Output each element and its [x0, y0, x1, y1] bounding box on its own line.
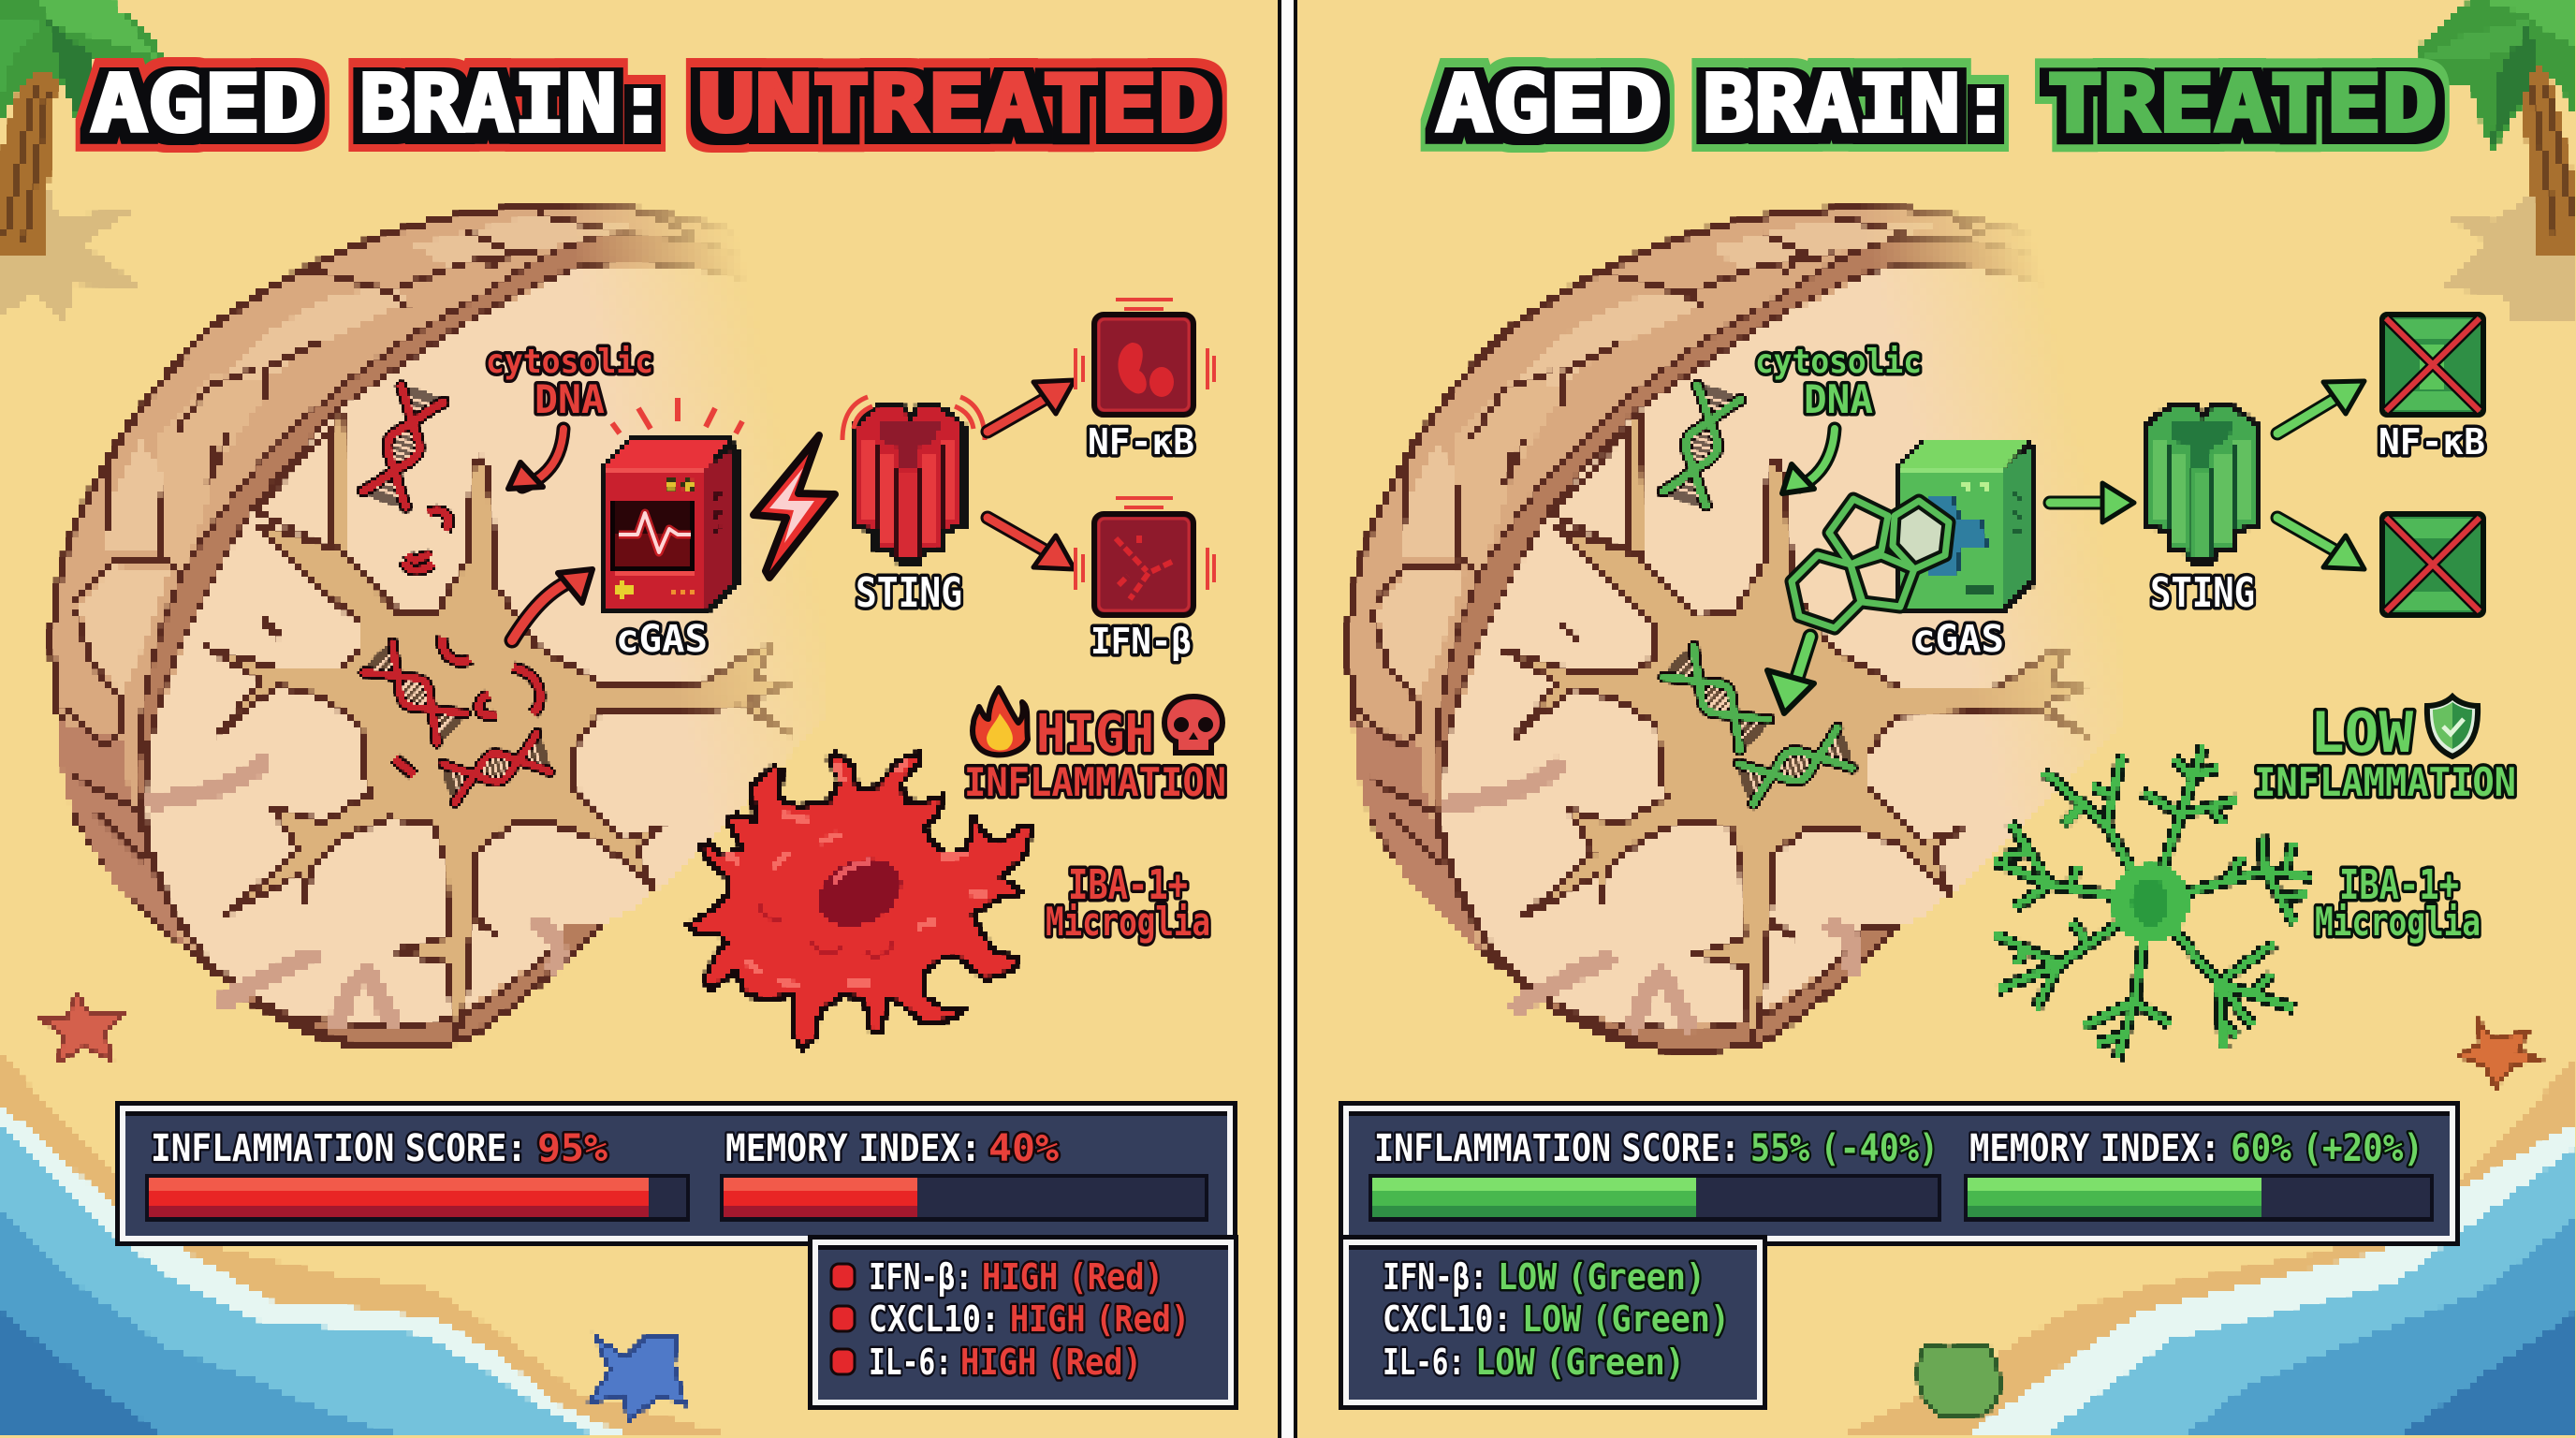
panel: score bars	[1339, 1101, 2460, 1246]
ocean: right	[1838, 1059, 2576, 1438]
heading: high inflammation: INFLAMMATION	[964, 759, 1226, 805]
inflammation bar	[1368, 1174, 1941, 1222]
icon: IFN-beta box, activated	[1076, 498, 1214, 615]
icon: STING channel, red	[854, 404, 964, 562]
title: untreated: UNTREATED	[697, 58, 1215, 151]
inflammation score text: INFLAMMATION SCORE:	[151, 1127, 527, 1170]
title: treated	[1436, 58, 2437, 151]
memory bar	[720, 1174, 1208, 1222]
row: IFN-beta	[831, 1256, 1164, 1298]
row: CXCL10	[831, 1299, 1190, 1340]
activation sparks	[612, 398, 742, 433]
row: CXCL10: HIGH (Red)	[1010, 1299, 1190, 1340]
inflammation score text: INFLAMMATION SCORE:	[1374, 1127, 1740, 1170]
row: IL-6: LOW (Green)	[1475, 1342, 1685, 1383]
arrow: drug to neuron DNA	[1767, 637, 1814, 713]
cytosolic DNA label: DNA	[534, 376, 605, 422]
label: cGAS: cGAS	[1912, 618, 2004, 661]
row: IFN-beta: LOW (Green)	[1498, 1256, 1705, 1298]
title: untreated	[91, 58, 1215, 151]
arrow: cGAS to STING	[2050, 483, 2134, 522]
heading: low inflammation	[2254, 700, 2516, 805]
title: untreated: AGED	[91, 58, 317, 151]
row: IFN-beta	[1383, 1256, 1705, 1298]
panel: cytokine list	[1339, 1235, 1767, 1410]
label: NF-kB: NF-κB	[2378, 421, 2485, 462]
arrow: STING to NF-kB	[988, 380, 1075, 432]
drug molecule	[1792, 499, 1949, 628]
palm tree: right	[2417, 0, 2576, 321]
heading: low inflammation: LOW	[2310, 700, 2414, 766]
label: IBA-1+ microglia: IBA-1+	[1068, 861, 1188, 909]
row: IL-6	[1383, 1342, 1685, 1383]
memory index value: 40%	[988, 1127, 1059, 1170]
DNA strand: upper	[361, 383, 448, 570]
row: IFN-beta: IFN-β:	[869, 1256, 973, 1298]
label: IBA-1+ microglia: Microglia	[1046, 899, 1210, 945]
row: IL-6: IL-6:	[1383, 1342, 1465, 1383]
ECG trace on cGAS screen	[619, 513, 691, 552]
arrow: STING to IFN-beta	[2277, 518, 2364, 569]
DNA strands in neuron	[361, 637, 552, 803]
microglia: activated, red	[688, 752, 1032, 1049]
title: treated: AGED	[1436, 58, 1662, 151]
heading: low inflammation: INFLAMMATION	[2254, 759, 2516, 805]
row: CXCL10	[1383, 1299, 1730, 1340]
label: IBA-1+ microglia	[2315, 861, 2481, 945]
DNA strands in neuron	[1661, 644, 1855, 805]
row: IL-6: IL-6:	[869, 1342, 952, 1383]
cytosolic DNA label	[1755, 343, 1922, 422]
memory index value: 60% (+20%)	[2231, 1127, 2423, 1170]
arrow: DNA to cGAS curve	[1782, 429, 1835, 493]
panel: cytokine list	[808, 1235, 1238, 1410]
panel: score bars	[115, 1101, 1237, 1246]
title: treated: BRAIN:	[1703, 58, 2012, 151]
icon: flame	[973, 688, 1028, 755]
microglia: resting, green	[1995, 746, 2311, 1059]
row: IL-6	[831, 1342, 1142, 1383]
heading: high inflammation: HIGH	[1036, 704, 1154, 765]
starfish: blue	[590, 1335, 685, 1421]
cytosolic DNA label: cytosolic	[486, 343, 653, 381]
label: STING: STING	[2150, 569, 2255, 617]
icon: shield	[2427, 697, 2478, 756]
label: IBA-1+ microglia	[1046, 861, 1210, 945]
cytosolic DNA label: DNA	[1804, 376, 1873, 422]
brain cross-section: untreated	[51, 205, 824, 1047]
brain cross-section: treated	[1348, 208, 2120, 1049]
palm tree: left	[0, 0, 165, 321]
icon: NF-kB box, blocked	[2382, 315, 2483, 415]
label: IBA-1+ microglia: Microglia	[2315, 899, 2481, 945]
icon: STING channel, green	[2146, 404, 2257, 562]
row: IFN-beta: HIGH (Red)	[982, 1256, 1164, 1298]
icon: cGAS machine, green	[1897, 442, 2033, 609]
memory index text: MEMORY INDEX:	[1969, 1127, 2220, 1170]
icon: cGAS machine, red	[603, 440, 737, 610]
row: IL-6: HIGH (Red)	[960, 1342, 1142, 1383]
row: CXCL10: CXCL10:	[869, 1299, 1000, 1340]
inflammation score value: 95%	[537, 1127, 607, 1170]
divider between panels	[1278, 0, 1297, 1438]
heading: high inflammation	[964, 704, 1226, 805]
row: CXCL10: LOW (Green)	[1522, 1299, 1730, 1340]
icon: IFN-beta box, blocked	[2382, 514, 2483, 615]
label: STING: STING	[856, 569, 962, 617]
arrow: DNA to cGAS curve	[508, 429, 564, 489]
arrow: STING to IFN-beta	[988, 518, 1075, 569]
inflammation bar	[145, 1174, 690, 1222]
label: IFN-beta: IFN-β	[1090, 621, 1192, 662]
signal marks: STING	[842, 397, 985, 440]
ocean: left	[0, 1053, 742, 1438]
memory index text: MEMORY INDEX:	[725, 1127, 981, 1170]
cytosolic DNA label	[486, 343, 653, 422]
icon: skull	[1164, 697, 1222, 753]
label: cGAS: cGAS	[616, 618, 708, 661]
title: treated: TREATED	[2047, 58, 2437, 151]
panel: treated	[1339, 58, 2516, 1410]
DNA strand: upper	[1661, 382, 1742, 509]
arrow: neuron to cGAS	[512, 569, 593, 640]
title: untreated: BRAIN:	[359, 58, 668, 151]
inflammation score value: 55% (-40%)	[1750, 1127, 1939, 1170]
cytosolic DNA label: cytosolic	[1755, 343, 1922, 381]
memory bar	[1964, 1174, 2434, 1222]
green sea creature	[1918, 1344, 1999, 1416]
label: IBA-1+ microglia: IBA-1+	[2339, 861, 2459, 909]
arrow: STING to NF-kB	[2277, 381, 2364, 433]
panel: untreated	[51, 58, 1238, 1410]
label: NF-kB: NF-κB	[1088, 421, 1194, 462]
starfish: red, left	[41, 994, 124, 1062]
starfish: orange, right	[2459, 1021, 2540, 1088]
icon: NF-kB box, activated	[1076, 300, 1214, 415]
row: CXCL10: CXCL10:	[1383, 1299, 1512, 1340]
row: IFN-beta: IFN-β:	[1383, 1256, 1487, 1298]
lightning bolt	[754, 435, 835, 578]
